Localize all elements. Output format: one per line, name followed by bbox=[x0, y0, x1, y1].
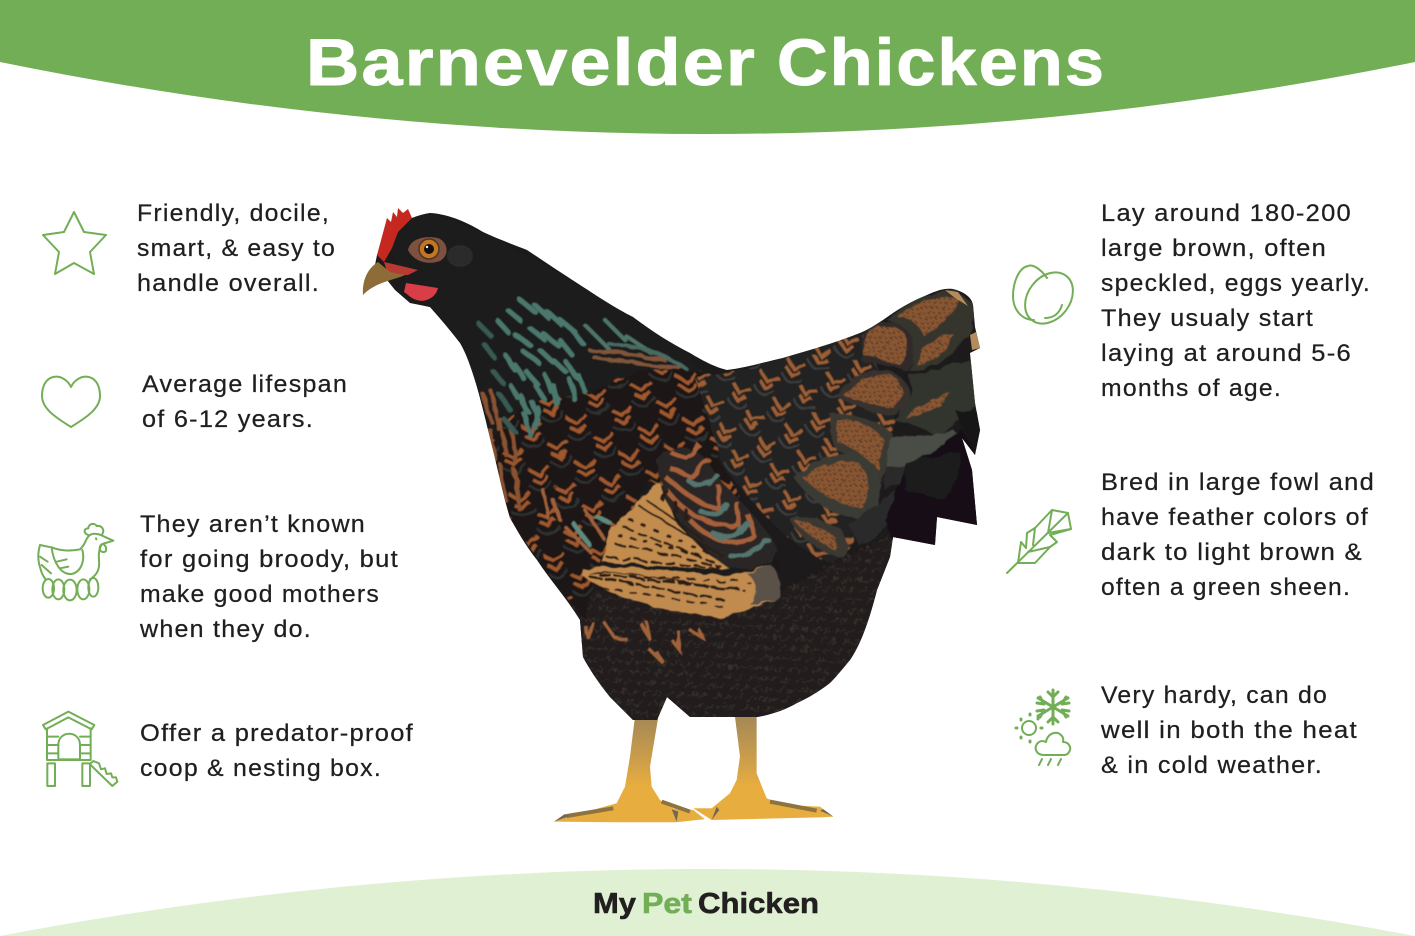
logo: My Pet Chicken bbox=[593, 888, 819, 920]
text: housing: coop & nesting box. bbox=[140, 755, 382, 782]
text: temperament: smart, & easy to bbox=[137, 235, 336, 262]
chicken plumage bbox=[385, 213, 985, 730]
text: lifespan bbox=[142, 371, 348, 433]
text: egg laying: speckled, eggs yearly. bbox=[1101, 270, 1371, 297]
text: hardiness bbox=[1100, 682, 1358, 779]
text: feather colors: dark to light brown & bbox=[1101, 539, 1363, 566]
feather rendering group bbox=[385, 213, 985, 662]
head dark area bbox=[412, 213, 442, 218]
text: feather colors: have feather colors of bbox=[1101, 504, 1369, 531]
text: feather colors bbox=[1101, 469, 1375, 601]
illustration: Barnevelder hen bbox=[363, 208, 985, 822]
neck dark shading bbox=[426, 220, 692, 436]
icon: feather bbox=[1007, 510, 1071, 573]
wing coverts base bbox=[657, 447, 778, 569]
text: broodiness: when they do. bbox=[139, 616, 312, 643]
header banner bbox=[0, 0, 1415, 134]
icon: weather bbox=[1016, 690, 1070, 765]
comb bbox=[377, 208, 412, 262]
covert copper bands bbox=[665, 443, 755, 542]
text: egg laying: months of age. bbox=[1101, 375, 1282, 402]
icon: heart bbox=[42, 377, 100, 427]
text: broodiness bbox=[139, 511, 399, 643]
text: hardiness: well in both the heat bbox=[1100, 717, 1358, 744]
icon: hen on eggs bbox=[38, 524, 113, 600]
text: egg laying: large brown, often bbox=[1101, 235, 1327, 262]
neck hackle teal feathers bbox=[480, 300, 585, 435]
text: broodiness: make good mothers bbox=[140, 581, 380, 608]
text: lifespan: Average lifespan bbox=[142, 371, 348, 398]
text: feather colors: Bred in large fowl and bbox=[1101, 469, 1375, 496]
text: housing: Offer a predator-proof bbox=[140, 720, 414, 747]
face skin bbox=[408, 237, 447, 263]
wing tip grey bbox=[747, 565, 779, 605]
eye bbox=[419, 239, 439, 259]
title: Chickens bbox=[777, 25, 1106, 99]
title bbox=[306, 25, 1106, 99]
icon: star bbox=[43, 212, 106, 274]
text: egg laying: They usualy start bbox=[1101, 305, 1314, 332]
inner wing feathers bbox=[543, 490, 610, 553]
chicken legs and feet bbox=[554, 717, 833, 822]
tail tan tips bbox=[945, 290, 980, 350]
covert teal tips bbox=[690, 477, 768, 556]
text: feather colors: often a green sheen. bbox=[1101, 574, 1351, 601]
breast scale feathers bbox=[490, 366, 780, 620]
tail covert feathers bbox=[790, 290, 980, 558]
text: lifespan: of 6-12 years. bbox=[142, 406, 314, 433]
logo: My Pet Chicken: My bbox=[593, 888, 636, 920]
text: temperament bbox=[137, 200, 336, 297]
text: broodiness: They aren’t known bbox=[140, 511, 366, 538]
back of neck feathers bbox=[585, 320, 685, 368]
primary flight feathers bbox=[583, 565, 779, 617]
text: egg laying bbox=[1101, 200, 1371, 402]
lower flank chevrons bbox=[585, 620, 702, 662]
copper fan feathers bbox=[602, 482, 730, 569]
title: Barnevelder bbox=[306, 25, 757, 99]
text: temperament: handle overall. bbox=[137, 270, 320, 297]
icon: chicken coop bbox=[43, 712, 117, 786]
wing feathers bbox=[543, 443, 779, 617]
text: egg laying: Lay around 180-200 bbox=[1101, 200, 1352, 227]
logo: My Pet Chicken: Chicken bbox=[698, 888, 819, 920]
ear patch bbox=[447, 245, 473, 267]
lower neck copper stripes bbox=[484, 392, 520, 510]
logo: My Pet Chicken: Pet bbox=[642, 888, 692, 920]
beak bbox=[363, 262, 405, 295]
text: hardiness: & in cold weather. bbox=[1101, 752, 1323, 779]
footer banner bbox=[0, 869, 1415, 936]
text: temperament: Friendly, docile, bbox=[137, 200, 330, 227]
black tail feathers bbox=[885, 410, 985, 550]
wattle bbox=[404, 283, 438, 301]
icon: eggs bbox=[1013, 263, 1083, 333]
text: housing bbox=[140, 720, 414, 782]
text: hardiness: Very hardy, can do bbox=[1101, 682, 1328, 709]
saddle scale feathers bbox=[695, 330, 895, 565]
text: egg laying: laying at around 5-6 bbox=[1101, 340, 1352, 367]
fluffy belly feathers bbox=[570, 530, 900, 730]
text: broodiness: for going broody, but bbox=[140, 546, 399, 573]
chicken body silhouette bbox=[375, 213, 980, 720]
